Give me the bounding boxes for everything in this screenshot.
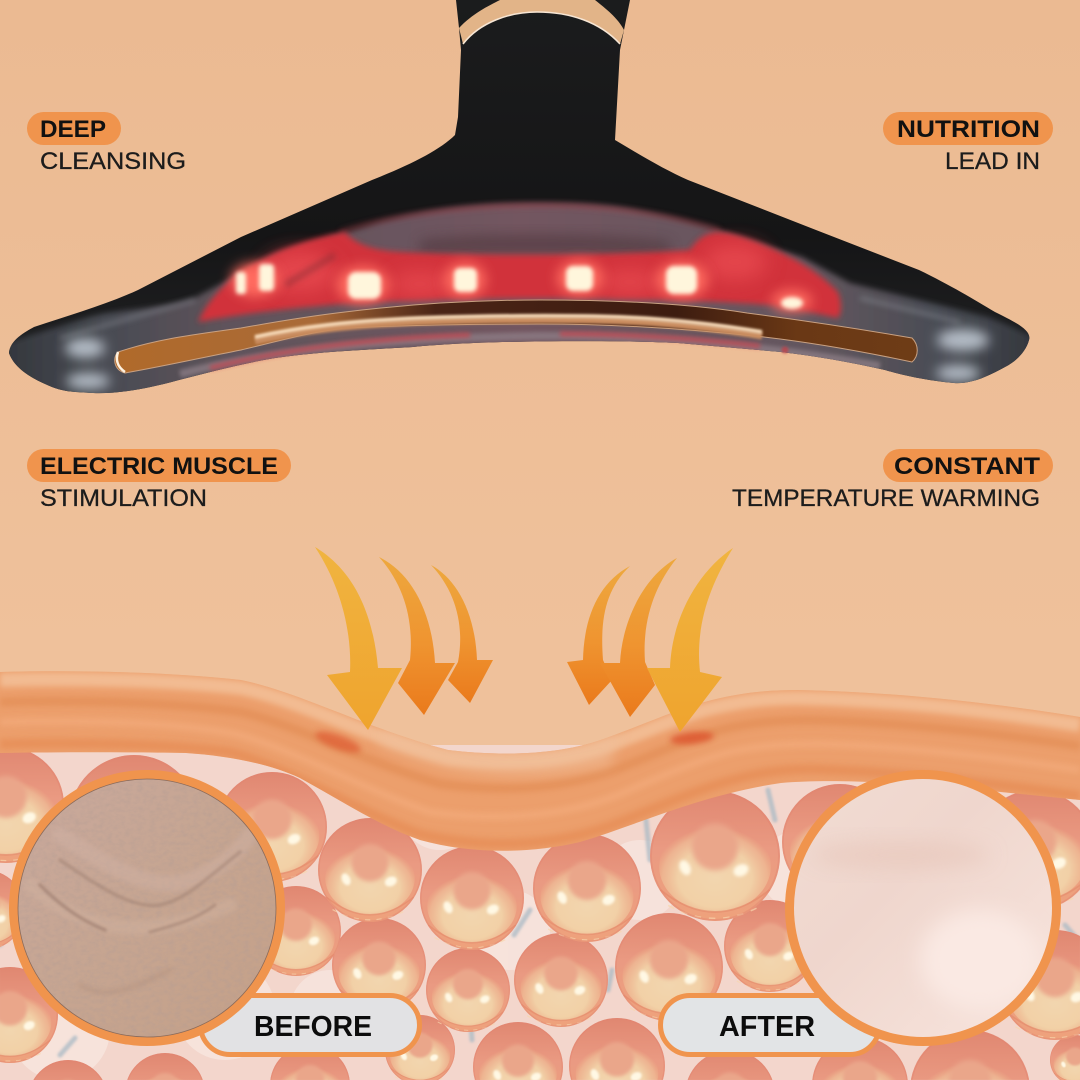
before pill [200,996,420,1054]
tip highlights [65,329,989,389]
label: deep cleansing: DEEP [40,116,106,143]
label: constant temperature warming: TEMPERATURE WARMING [732,485,1040,512]
label: nutrition lead in: LEAD IN [945,148,1040,175]
label: nutrition lead in: NUTRITION [897,116,1040,143]
before pill: BEFORE [254,1011,372,1043]
label: electric muscle stimulation: ELECTRIC MUSCLE [40,453,278,480]
arrows: right group [567,548,733,732]
gold collar [459,0,624,44]
soft lighter centre of skin edge [380,725,620,775]
label: nutrition lead in [883,112,1053,175]
copper slot [115,300,917,373]
red glow [198,232,841,322]
skin layer band [0,671,1080,851]
pressure mark: left [314,728,362,755]
device handle and body [9,0,1029,393]
pressure mark: right [669,730,715,746]
lower red reflection [210,334,760,368]
brighter red haze [264,244,767,296]
label: electric muscle stimulation: STIMULATION [40,485,207,512]
dark mottling in red [285,255,335,285]
arrows: left group [315,547,493,730]
small right red fleck [782,346,788,354]
LED lights [231,260,812,312]
before circle: wrinkled skin [9,770,285,1046]
device [0,0,1040,400]
label: constant temperature warming [732,449,1053,512]
after pill [660,996,880,1054]
copper strip highlight [255,320,762,341]
rim of window [340,205,720,232]
pale lower glass strip [180,336,880,374]
label: deep cleansing [27,112,186,175]
dark mauve stripe above lights [420,234,670,254]
translucent light window [0,203,1040,400]
label: deep cleansing: CLEANSING [40,148,186,175]
soft streaks on grey glass [60,298,960,338]
pearl collagen layer [0,745,1080,1080]
after pill: AFTER [719,1011,815,1043]
after circle: smooth skin [785,770,1061,1046]
label: electric muscle stimulation [27,449,291,512]
label: constant temperature warming: CONSTANT [894,453,1040,480]
